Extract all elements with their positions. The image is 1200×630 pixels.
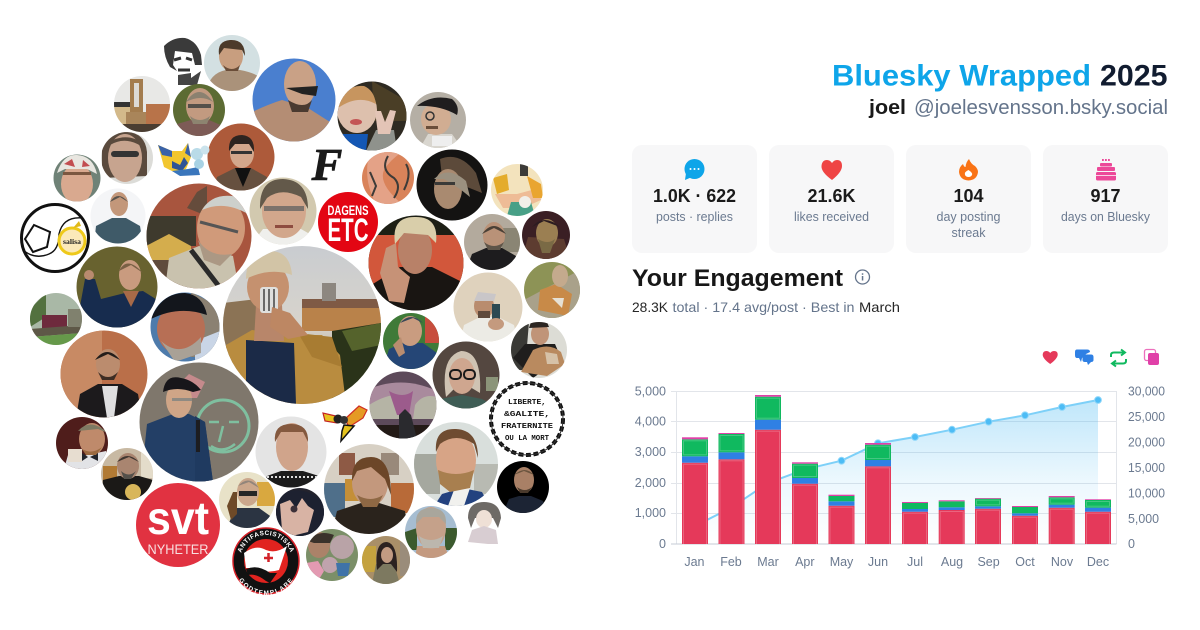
bars: reposts (682, 397, 1111, 513)
avatar: orange abstract (362, 152, 414, 204)
logo: liberte egalite chain ring (491, 383, 563, 455)
avatar: man with beanie and red-lit face (150, 292, 220, 362)
logo: ring with pentagon and apple: salisa (63, 238, 82, 246)
card: days on Bluesky: 917 (1090, 186, 1120, 206)
avatar: man in dark hat (416, 149, 488, 221)
avatar: man in blue shirt (90, 188, 146, 244)
card: posts and replies (632, 145, 757, 253)
avatar: blond bearded man in blue suit (414, 422, 498, 506)
icon: reposts (1111, 350, 1126, 366)
avatar: sketched portrait (468, 502, 501, 544)
avatar: man with bulldog (511, 322, 567, 378)
icon: likes (1043, 351, 1058, 364)
title: Bluesky Wrapped (832, 60, 1091, 92)
month labels: Sep (977, 555, 1000, 569)
cumulative line (694, 400, 1098, 526)
engagement summary: total · 17.4 avg/post · Best in (672, 299, 854, 315)
avatar: blonde man in red chair (368, 215, 464, 311)
header (832, 60, 1168, 119)
left axis labels: 1,000 (635, 506, 666, 520)
avatar: man on black background (497, 461, 549, 513)
logo: cartoon wasp (323, 406, 367, 441)
right axis labels: 0 (1128, 537, 1135, 551)
left axis labels: 2,000 (635, 476, 666, 490)
avatar: bearded man, painted (522, 211, 570, 259)
combined bar and line chart (635, 384, 1165, 569)
card: streak: streak (952, 226, 986, 240)
avatar: man in flat cap (410, 92, 466, 148)
icon: quotes (1144, 350, 1159, 365)
avatar: man in tan shirt (204, 35, 262, 91)
card: streak: 104 (954, 186, 984, 206)
month labels (684, 555, 1109, 569)
left axis labels (635, 384, 666, 551)
left axis labels: 3,000 (635, 445, 666, 459)
icon: heart (821, 160, 842, 180)
user handle: @joelesvensson.bsky.social (914, 97, 1168, 119)
title: 2025 (1100, 60, 1168, 92)
right axis labels: 10,000 (1128, 486, 1165, 500)
avatar: man with cap and grey beard (146, 183, 252, 289)
logo: ring with pentagon and apple (22, 204, 88, 272)
logo: Antifascistiska Godtemplare: ANTIFASCISTISKA (238, 530, 294, 553)
right axis labels: 15,000 (1128, 461, 1165, 475)
month labels: Jun (868, 555, 888, 569)
avatar: man with bottle (219, 472, 275, 528)
avatar: woman with long dark hair (362, 536, 410, 584)
month labels: Jan (684, 555, 705, 569)
logo: liberte egalite chain ring: OU LA MORT (505, 435, 550, 443)
avatar: man in glasses, close-up (249, 177, 317, 245)
avatar: bald man with sunglasses (252, 58, 336, 142)
avatar: garden with red hut (30, 293, 82, 345)
month labels: Apr (795, 555, 815, 569)
avatar: mirror selfie in tiled room (453, 272, 523, 342)
user handle: joel (868, 97, 906, 119)
avatar: man at brick wall (207, 123, 275, 191)
icon: chat bubble (684, 159, 704, 180)
bars: likes (682, 430, 1111, 544)
avatar: raccoon logo (158, 143, 210, 176)
card: likes: 21.6K (808, 186, 856, 206)
avatar: comic pinup (491, 164, 543, 216)
chart grid (671, 391, 1116, 544)
avatar: F logo: F (311, 139, 342, 190)
right axis labels: 25,000 (1128, 410, 1165, 424)
avatar: man with long hair and bookshelf (323, 443, 415, 535)
right axis labels (1128, 384, 1165, 551)
avatar: older man with glasses (173, 84, 225, 136)
card: streak: day posting (936, 210, 1001, 224)
avatar: hand gesture (276, 488, 324, 536)
logo: SVT Nyheter: NYHETER (148, 541, 208, 557)
engagement summary: 28.3K (632, 299, 669, 315)
logo: Dagens ETC: DAGENS (328, 202, 368, 218)
avatar: man with chalk drawing (139, 362, 259, 482)
month labels: Oct (1015, 555, 1035, 569)
icon: info (856, 270, 870, 284)
bars: replies (682, 420, 1111, 516)
month labels: Dec (1087, 555, 1109, 569)
logo: liberte egalite chain ring: &GALITE, (504, 411, 550, 419)
logo: Dagens ETC: ETC (328, 212, 368, 248)
avatar: stencil portrait (164, 38, 202, 85)
engagement summary: March (859, 299, 900, 315)
icon: cake (1096, 159, 1116, 180)
month labels: Mar (757, 555, 779, 569)
logo: Antifascistiska Godtemplare: GODTEMPLARE (240, 578, 293, 595)
avatar bubble cloud (20, 35, 580, 595)
card: posts and replies: posts · replies (656, 210, 733, 224)
bar inner highlights (684, 398, 1110, 546)
left axis labels: 0 (659, 537, 666, 551)
engagement summary (632, 299, 900, 315)
chart legend icons (1043, 350, 1159, 366)
avatar: man in black patterned sweater (255, 416, 327, 488)
logo: SVT Nyheter (136, 483, 220, 567)
avatar: main portrait with coffee cup (223, 246, 381, 404)
card: streak (906, 145, 1031, 253)
avatar: man at brick wall in black suit (60, 330, 148, 418)
month labels: Jul (907, 555, 923, 569)
card: posts and replies: 1.0K · 622 (653, 186, 736, 206)
avatar: room with shelf (114, 76, 170, 132)
bars: quotes (682, 395, 1111, 507)
card: days on Bluesky (1043, 145, 1168, 253)
avatar: man in black tee with print (101, 448, 153, 500)
right axis labels: 20,000 (1128, 436, 1165, 450)
avatar: man with round glasses (101, 132, 153, 184)
avatar: woman giving peace sign (337, 81, 407, 151)
right axis labels: 30,000 (1128, 384, 1165, 398)
avatar: man in green field, navy fleece (76, 246, 159, 328)
avatar: man with bow tie (56, 417, 108, 469)
month labels: Feb (720, 555, 742, 569)
card: days on Bluesky: days on Bluesky (1061, 210, 1151, 224)
icon: flame (959, 159, 978, 180)
logo: liberte egalite chain ring: LIBERTE, (508, 399, 546, 407)
logo: Dagens ETC (318, 192, 378, 252)
logo: Antifascistiska Godtemplare (232, 527, 300, 595)
month labels: Aug (941, 555, 963, 569)
logo: SVT Nyheter: svt (147, 492, 209, 544)
avatar: man on phone in blue tee (383, 313, 439, 369)
left axis labels: 4,000 (635, 414, 666, 428)
card: likes (769, 145, 894, 253)
avatar: man in black blazer (464, 214, 520, 270)
line markers (838, 397, 1101, 464)
cumulative area (694, 400, 1098, 544)
month labels: Nov (1051, 555, 1074, 569)
heading: your engagement: Your Engagement (632, 265, 843, 292)
avatar: aurora silhouette (369, 371, 437, 439)
avatar: older woman with glasses (432, 341, 500, 409)
left axis labels: 5,000 (635, 384, 666, 398)
avatar: man among flowers (306, 529, 358, 581)
month labels: May (830, 555, 854, 569)
icon: replies (1075, 350, 1094, 365)
logo: liberte egalite chain ring: FRATERNITE (501, 423, 554, 431)
avatar: grey-haired man with stubble (405, 506, 457, 558)
right axis labels: 5,000 (1128, 512, 1159, 526)
avatar: boy with cap (53, 154, 101, 204)
card: likes: likes received (794, 210, 869, 224)
avatar: patterned shirt with greenery (524, 262, 580, 318)
stat cards (632, 145, 1168, 253)
